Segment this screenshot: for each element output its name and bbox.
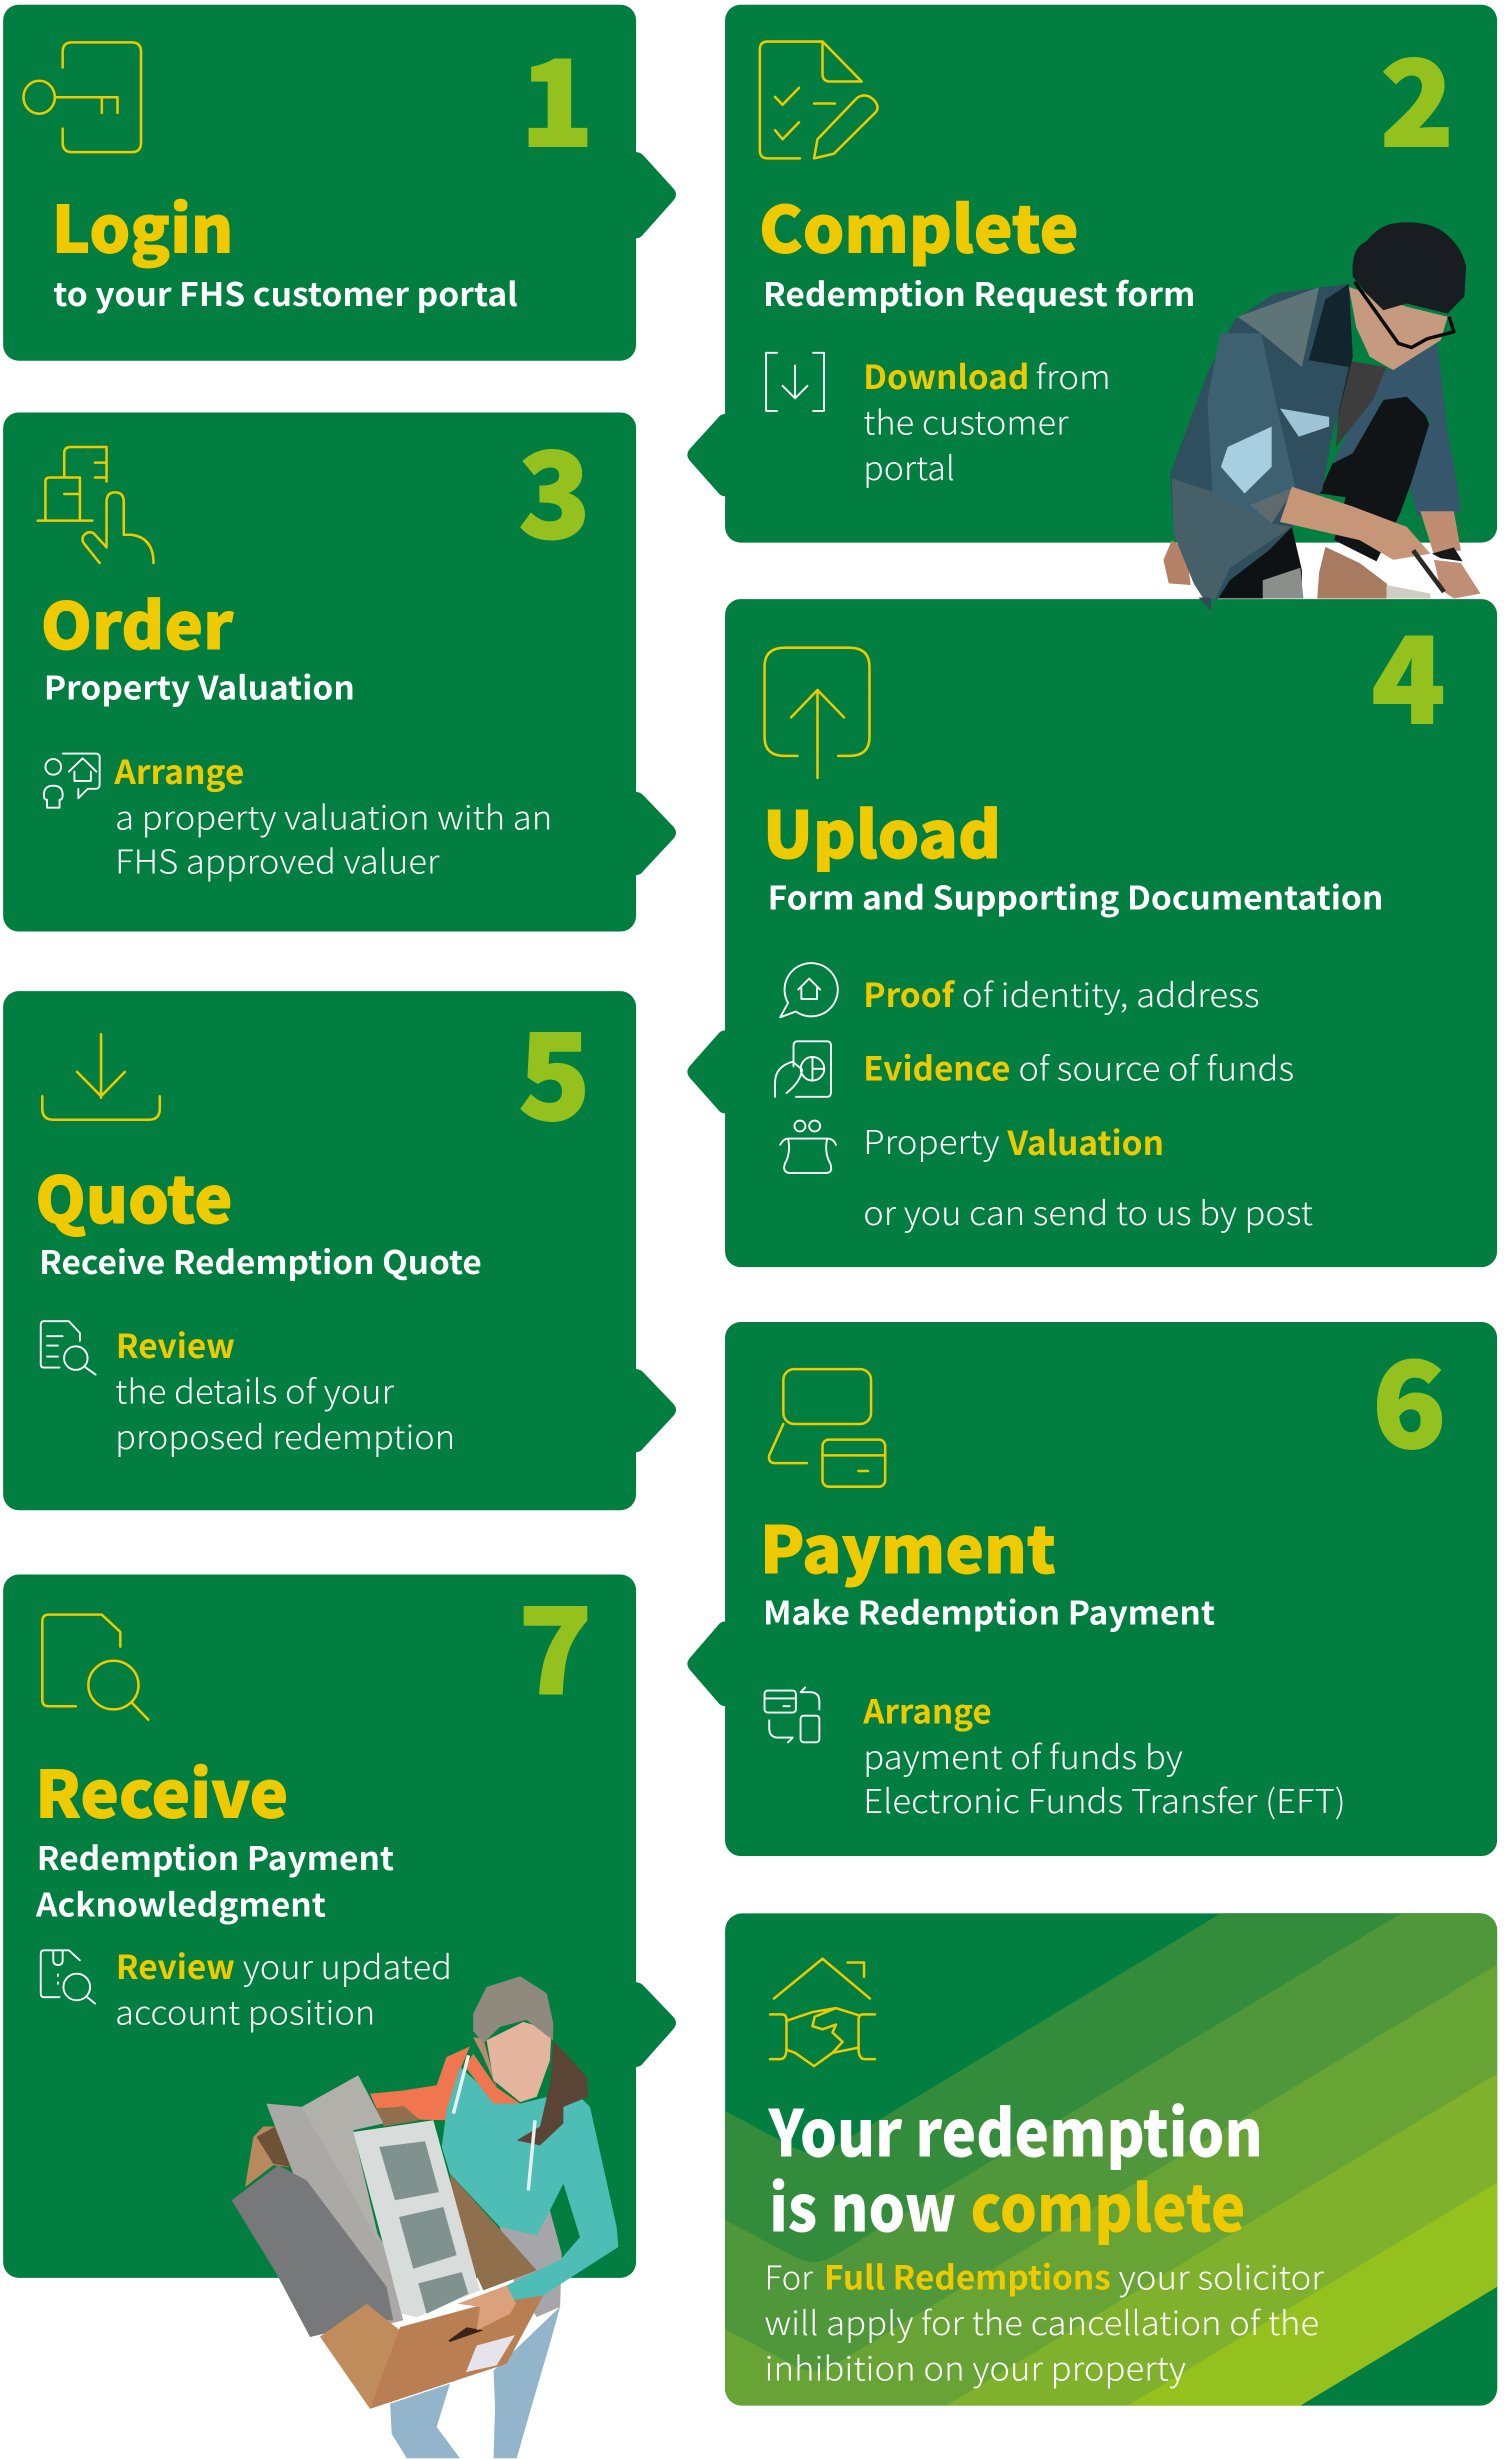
watch — [1432, 547, 1463, 561]
card shape 4 — [687, 599, 1497, 1267]
heading: Quote: Quote — [35, 1148, 233, 1242]
text: full redemptions note: inhibition on your property — [765, 2344, 1186, 2391]
pocket highlight — [1280, 409, 1329, 437]
text: proof: Proof — [863, 970, 956, 1017]
number 5: 5 — [519, 983, 591, 1155]
text: evidence: of source of funds — [1018, 1043, 1294, 1091]
icon: download tray — [42, 1034, 160, 1120]
hair top — [473, 1976, 553, 2043]
text: arrange valuation: Arrange — [113, 747, 244, 794]
heading: Order: Order — [41, 574, 234, 668]
sleeve — [1207, 333, 1295, 523]
text: review account — [115, 1942, 452, 2035]
hand — [457, 2285, 516, 2330]
panel: step 2 complete — [687, 5, 1497, 543]
heading: Complete: Complete — [759, 177, 1079, 271]
subheading: Make Redemption Payment — [763, 1589, 1215, 1635]
jacket shoulder — [1238, 287, 1319, 367]
text: evidence — [863, 1043, 1294, 1091]
text: arrange valuation — [113, 747, 552, 884]
panel: step 1 login — [3, 5, 676, 361]
icon: speech bubble house — [780, 963, 838, 1017]
number 7: 7 — [519, 1557, 592, 1729]
card shape 2 — [687, 5, 1497, 543]
forearm — [1280, 487, 1430, 560]
collar — [1309, 284, 1353, 433]
icon: bag with rings — [780, 1121, 836, 1173]
panel: step 3 order — [3, 401, 676, 932]
box label — [466, 2335, 515, 2372]
text: arrange payment: Arrange — [862, 1686, 992, 1734]
icon: card to phone transfer — [765, 1687, 819, 1742]
icon: checklist with pencil — [760, 42, 878, 158]
number 6: 6 — [1372, 1310, 1446, 1483]
icon: file search — [41, 1950, 95, 2004]
glasses — [1355, 282, 1454, 348]
grey board back — [266, 2104, 403, 2324]
number 3: 3 — [519, 401, 591, 573]
text: property valuation — [863, 1117, 1164, 1165]
jacket hem — [1172, 478, 1292, 610]
box front — [370, 2295, 543, 2409]
window frame — [353, 2120, 480, 2317]
text: download from portal: the customer — [863, 397, 1069, 444]
drawstrings — [453, 2055, 535, 2190]
text: download from portal: portal — [863, 443, 955, 490]
card shape 5 — [3, 991, 676, 1510]
sleeve cuff — [1250, 487, 1295, 523]
icon: house and handshake — [770, 1959, 875, 2066]
grey waist — [500, 2210, 562, 2317]
heading: your redemption: Your redemption — [768, 2081, 1263, 2175]
text: review details: proposed redemption — [115, 1412, 455, 1459]
text: property valuation: Valuation — [1006, 1118, 1164, 1165]
orange hood — [465, 2054, 520, 2104]
tool — [1413, 550, 1444, 592]
photo: woman carrying cardboard box — [232, 1976, 618, 2458]
number 2: 2 — [1380, 9, 1454, 181]
subheading: Redemption Payment — [37, 1834, 394, 1880]
heading: is now complete: is now — [769, 2157, 956, 2251]
panel: step 7 receive — [3, 1557, 676, 2278]
window panes — [379, 2141, 439, 2200]
pants — [1319, 397, 1430, 561]
orange sleeve — [370, 2046, 470, 2120]
photo fragment: jacket tip — [1198, 597, 1211, 611]
number 1: 1 — [520, 9, 594, 181]
subheading: Form and Supporting Documentation — [768, 874, 1383, 920]
grey board front — [302, 2075, 383, 2244]
text: full redemptions note: For — [765, 2253, 813, 2300]
jacket body — [1170, 284, 1353, 610]
icon: upload arrow box — [765, 648, 870, 778]
text: download from portal — [863, 352, 1111, 490]
hair — [1353, 222, 1466, 314]
far jacket panel — [1332, 343, 1461, 515]
panel: step 5 quote — [3, 983, 676, 1510]
text: review details — [115, 1321, 455, 1459]
panel: step 6 payment — [687, 1310, 1497, 1856]
face — [1349, 287, 1448, 370]
card shape 6 — [687, 1322, 1497, 1856]
text: review account: your updated — [243, 1942, 452, 1989]
text: arrange valuation: a property valuation with an — [115, 793, 552, 840]
front foot — [1317, 547, 1393, 598]
left foot — [1163, 540, 1191, 585]
icon: buildings and pointing hand — [38, 447, 154, 563]
face — [487, 2022, 551, 2102]
heading: is now complete — [769, 2157, 1246, 2251]
far hand — [1434, 560, 1480, 598]
subheading: Redemption Request form — [763, 270, 1195, 316]
striped background — [725, 1913, 1498, 2406]
text: full redemptions note — [765, 2253, 1324, 2391]
heading: Upload: Upload — [763, 783, 1001, 877]
heading: is now complete: complete — [971, 2157, 1245, 2251]
icon: document search — [42, 1615, 148, 1720]
grey roll — [232, 2165, 393, 2337]
text: arrange valuation: FHS approved valuer — [115, 836, 440, 884]
heading: Receive: Receive — [35, 1743, 288, 1837]
box handle hole — [448, 2327, 483, 2342]
text: arrange payment — [862, 1686, 1346, 1823]
subheading: Acknowledgment — [35, 1880, 326, 1926]
box inner flap — [450, 2174, 537, 2290]
text: arrange payment: payment of funds by — [863, 1732, 1183, 1779]
box side flap — [320, 2304, 400, 2409]
text: review account: account position — [115, 1988, 375, 2035]
jeans — [390, 2384, 460, 2458]
card shape 1 — [3, 5, 676, 361]
far arm — [1420, 511, 1461, 554]
subheading — [35, 1834, 394, 1926]
panel: step 4 upload — [687, 586, 1497, 1267]
tablet — [1386, 585, 1430, 598]
heading: Login: Login — [52, 177, 233, 271]
text: evidence: Evidence — [863, 1043, 1011, 1091]
back hair — [517, 2040, 588, 2145]
text: send by post: or you can send to us by post — [863, 1188, 1313, 1235]
subheading: Receive Redemption Quote — [39, 1238, 482, 1284]
icon: download bracket — [766, 353, 824, 411]
subheading: Property Valuation — [44, 663, 355, 709]
icon: person with house bubble — [44, 754, 100, 808]
text: download from portal: Download — [863, 352, 1029, 399]
text: full redemptions note: will apply for the cancellation of the — [765, 2298, 1319, 2345]
neck and ear — [473, 2037, 497, 2087]
icon: monitor and card — [769, 1369, 885, 1487]
icon: document magnifier — [41, 1321, 96, 1375]
heading: Payment: Payment — [760, 1498, 1056, 1592]
subheading: to your FHS customer portal — [53, 270, 518, 316]
box far flap — [245, 2127, 290, 2187]
text: full redemptions note: Full Redemptions — [824, 2253, 1111, 2300]
icon: hand holding phone — [775, 1041, 831, 1097]
text: proof: of identity, address — [962, 970, 1260, 1017]
card shape 7 — [3, 1575, 676, 2278]
text: full redemptions note: your solicitor — [1119, 2253, 1324, 2300]
sleeve highlight — [1221, 427, 1272, 494]
lower legs — [1209, 527, 1302, 598]
text: review details: Review — [116, 1321, 235, 1368]
text: review details: the details of your — [115, 1367, 394, 1414]
photo: man kneeling with tool — [1163, 222, 1480, 610]
number 4: 4 — [1372, 586, 1445, 758]
icon: key and door — [24, 42, 141, 152]
card shape 3 — [3, 412, 676, 932]
text: property valuation: Property — [863, 1117, 1000, 1164]
teal hoodie — [442, 2067, 618, 2312]
text: arrange payment: Electronic Funds Transfer (EFT) — [863, 1776, 1346, 1823]
text: review account: Review — [116, 1942, 235, 1989]
panel: redemption complete — [725, 1913, 1498, 2406]
text: download from portal: from — [1036, 352, 1111, 399]
t-shirt — [1336, 360, 1386, 447]
